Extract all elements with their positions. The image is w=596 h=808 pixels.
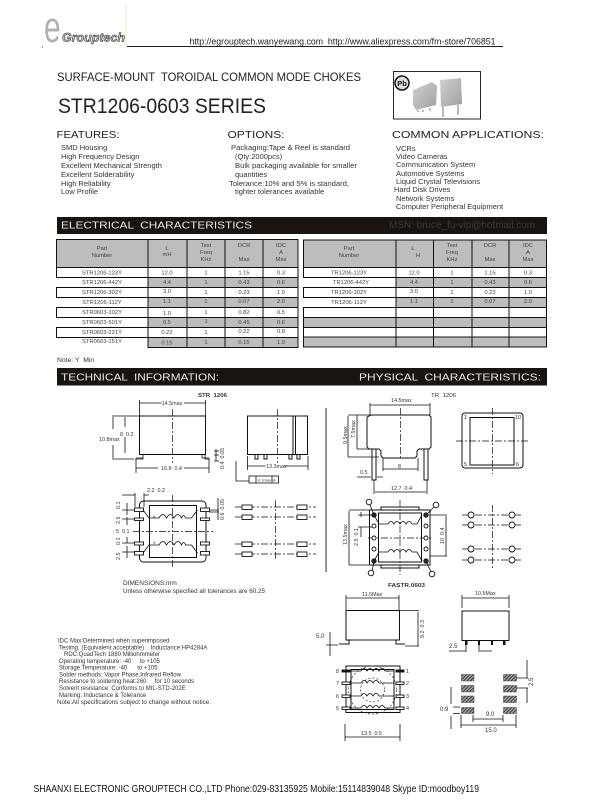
specification notes: Solvent resistance: Conforms to MIL-STD-202E xyxy=(59,686,186,692)
table: STR series: 1 xyxy=(204,330,208,336)
table: STR series: Max xyxy=(239,257,250,263)
drawing: STR 1206 front view: 10.8max xyxy=(99,437,120,443)
panel: features: Excellent Mechanical Strength xyxy=(61,161,162,170)
specification notes: RDC:QuadTech 1880 Milliohmmeter xyxy=(64,652,160,658)
drawing: STR 1206 front view: 14.5max xyxy=(162,401,183,407)
table: STR series xyxy=(56,239,298,348)
table: STR series: 1 xyxy=(204,310,208,316)
table: STR series: Part xyxy=(97,246,108,252)
table: STR series: 1.15 xyxy=(238,270,250,276)
drawing: TR 1206 profile: 8 xyxy=(398,464,401,470)
table: STR series: 1 xyxy=(204,319,208,325)
drawing: STR 1206 schematic bottom view: 2.5 0.1 xyxy=(116,538,122,560)
panel: features: Excellent Solderability xyxy=(61,170,135,179)
logo: e xyxy=(44,2,61,51)
table: STR series: 0.5 xyxy=(163,320,171,326)
website urls: http://egrouptech.wanyewang.com http://www.aliexpress.com/fm-store/706851 xyxy=(190,36,496,48)
table: TR series: Test xyxy=(447,243,458,249)
drawing: STR 1206 schematic bottom view xyxy=(116,488,226,568)
table: TR series: 0.43 xyxy=(484,280,496,286)
drawing: TR 1206 top view: 5 xyxy=(464,462,467,468)
table: TR series: Freq xyxy=(446,250,458,256)
product photo with Pb-free mark xyxy=(394,72,480,119)
table: TR series: 2.0 xyxy=(524,299,532,305)
subtitle: SURFACE-MOUNT TOROIDAL COMMON MODE CHOKES xyxy=(57,70,361,84)
table: TR series: A xyxy=(526,250,530,256)
drawing: STR 1206 schematic bottom view: * xyxy=(153,542,156,548)
table: TR series: 0.23 xyxy=(484,290,496,296)
drawing: FASTR 0603 bottom view: 6 xyxy=(336,694,339,700)
drawing: TR 1206 profile: TR 1206 xyxy=(431,393,456,399)
drawing: STR 1206 front view: 0.4 0.05 xyxy=(220,448,226,469)
table: STR series: 4.4 xyxy=(163,280,172,286)
drawing: STR 1206 schematic bottom view: 2.2 0.2 xyxy=(147,488,165,494)
panel: common applications: Video Cameras xyxy=(396,152,448,161)
table: STR series: mH xyxy=(162,252,172,258)
drawing: FASTR 0603 front view: 11.5Max xyxy=(362,592,383,598)
drawing: FASTR 0603 front view: 5.0 xyxy=(316,634,325,640)
specification notes: Testing: (Equivalent acceptable) Inductance:HP4284A xyxy=(59,646,207,652)
specification notes: Storage Temperature: -40 to +105 xyxy=(59,666,158,672)
table: TR series: 1 xyxy=(450,290,454,296)
logo xyxy=(42,2,126,51)
drawing: STR 1206 land pattern xyxy=(235,500,316,561)
drawing: FASTR 0603 bottom view: 4 xyxy=(406,706,409,712)
table: STR series: 1.0 xyxy=(277,340,285,346)
drawing: STR 1206 front view: STR 1206 xyxy=(198,393,227,399)
panel: options: (Qty:2000pcs) xyxy=(235,152,283,161)
table: TR series: 1.1 xyxy=(410,299,418,305)
specification notes: IDC Max:Determined when superimposed xyxy=(58,638,169,644)
table: STR series: 1 xyxy=(204,340,208,346)
panel: features: Low Profile xyxy=(61,187,98,196)
panel: common applications: Computer Peripheral Equipment xyxy=(396,202,504,211)
drawing: STR 1206 schematic bottom view: 0.6 0.05 xyxy=(220,499,226,520)
table: STR series: IDC xyxy=(276,243,286,249)
table: STR series: L xyxy=(165,246,169,252)
table: TR series: 1.0 xyxy=(524,290,532,296)
specification notes: Operating temperature: -40 to +105 xyxy=(59,659,161,665)
drawing: TR 1206 schematic: 13.5max xyxy=(343,524,349,545)
specification notes: Solder methods: Vapor Phase,Infrared Reflow xyxy=(59,672,182,678)
drawing: FASTR 0603 bottom view: 7 xyxy=(336,681,339,687)
heading: electrical characteristics: MSN: bruce_fu-vip@hotmail.com xyxy=(389,219,535,231)
panel: options: Tolerance:10% and 5% is standard, xyxy=(229,179,349,188)
table: STR series: 0.45 xyxy=(238,320,250,326)
table: TR series: DCR xyxy=(484,243,496,249)
drawing: FASTR 0603 footprint: 2.5 xyxy=(529,677,535,686)
header rule xyxy=(127,46,503,47)
drawing: STR 1206 side view: A xyxy=(273,478,276,482)
table: STR series: 0.3 xyxy=(277,270,285,276)
heading: technical and physical characteristics: PHYSICAL CHARACTERISTICS: xyxy=(359,372,541,384)
table: TR series: 0.07 xyxy=(484,299,496,305)
table note: Note: Y Min xyxy=(57,357,94,364)
dimensions note: DIMENSIONS:mm xyxy=(123,580,177,587)
drawing: STR 1206 side view: 0.1max xyxy=(258,478,271,482)
table: STR series: Max xyxy=(276,257,287,263)
drawing: TR 1206 profile: 14.5max xyxy=(391,398,412,404)
table: STR series: STR1206-123Y xyxy=(82,270,122,276)
table: STR series: STR0603-151Y xyxy=(82,339,122,345)
table: TR series xyxy=(304,240,546,347)
dimensions note xyxy=(123,580,265,595)
table: STR series: 0.22 xyxy=(238,329,250,335)
panel: features: SMD Housing xyxy=(61,143,107,152)
drawing: TR 1206 schematic: 10 0.4 xyxy=(440,528,446,544)
table: STR series: 0.15 xyxy=(161,340,173,346)
drawing: FASTR 0603 bottom view: 8 xyxy=(336,669,339,675)
table: TR series: Number xyxy=(339,253,359,259)
table: TR series: Max xyxy=(485,257,496,263)
specification notes: Marking: Inductance & Tolerance xyxy=(59,693,147,699)
specification notes: Resistance to soldering heat:260 for 10 seconds xyxy=(59,679,194,685)
drawing: TR 1206 schematic xyxy=(343,499,447,577)
table: STR series: 0.43 xyxy=(238,280,250,286)
drawing: FASTR 0603 bottom view: 1 xyxy=(406,669,409,675)
heading: technical and physical characteristics: TECHNICAL INFORMATION: xyxy=(61,372,219,384)
drawing: FASTR 0603 footprint xyxy=(440,660,535,734)
table: STR series: 0.6 xyxy=(277,280,285,286)
panel: common applications: Automotive Systems xyxy=(396,169,465,178)
drawing: TR 1206 profile: 0.5 xyxy=(360,470,368,476)
drawing: FASTR 0603 side view: 2.5 xyxy=(449,644,458,650)
panel: options xyxy=(228,129,358,196)
panel: common applications: Network Systems xyxy=(396,194,455,203)
table: TR series: TR1206-123Y xyxy=(331,270,367,276)
table: STR series: STR1206-112Y xyxy=(82,300,122,306)
table: TR series: 1 xyxy=(450,280,454,286)
footer contact line: SHAANXI ELECTRONIC GROUPTECH CO.,LTD Phone:029-83135925 Mobile:15114839048 Skype ID:moodboy119 xyxy=(34,784,479,795)
table: STR series: 1 xyxy=(204,290,208,296)
drawing: TR 1206 land pattern xyxy=(462,505,521,570)
drawing: FASTR 0603 front view: 8.2 0.3 xyxy=(420,620,426,638)
table: TR series: 1.15 xyxy=(484,270,496,276)
table: STR series: KHz xyxy=(201,257,212,263)
heading: electrical characteristics: ELECTRICAL CHARACTERISTICS xyxy=(61,220,252,232)
table: TR series: H xyxy=(416,253,420,259)
panel: options: tighter tolerances available xyxy=(235,187,324,196)
dimensions note: Unless otherwise specified all tolerances are 60.25 xyxy=(123,588,265,595)
table: STR series: 1 xyxy=(204,270,208,276)
panel: options: Packaging:Tape & Reel is standard xyxy=(231,143,350,152)
drawing: TR 1206 top view: 10 xyxy=(515,415,521,421)
drawing: TR 1206 profile: 12.7 0.4 xyxy=(391,486,412,492)
panel: common applications xyxy=(392,129,544,211)
drawing: TR 1206 top view: 1 xyxy=(464,415,467,421)
heading: electrical characteristics xyxy=(57,217,547,234)
table: TR series: 0.3 xyxy=(524,270,532,276)
drawing: STR 1206 front view xyxy=(99,393,227,473)
logo: Grouptech xyxy=(62,32,125,44)
table: STR series: STR0603-102Y xyxy=(82,310,122,316)
drawing: FASTR 0603 bottom view: 5 xyxy=(336,706,339,712)
table: TR series: L xyxy=(411,246,415,252)
specification notes: Note:All specifications subject to change without notice. xyxy=(57,700,211,706)
drawing: STR 1206 front view: 16.8 0.4 xyxy=(161,466,182,472)
table: STR series: Freq xyxy=(200,250,212,256)
table: STR series: 0.82 xyxy=(238,310,250,316)
table: STR series: DCR xyxy=(238,243,250,249)
drawing: FASTR 0603 bottom view: 3 xyxy=(406,694,409,700)
table: STR series: 1 xyxy=(204,280,208,286)
table: STR series: 0.23 xyxy=(238,290,250,296)
drawing: FASTR 0603 front view xyxy=(316,592,426,656)
table: STR series: A xyxy=(279,250,283,256)
table: TR series: 12.0 xyxy=(408,270,420,276)
table: STR series: 0.6 xyxy=(277,320,285,326)
table: STR series: 1.1 xyxy=(163,299,171,305)
drawing: STR 1206 side view: 13.3max xyxy=(266,464,287,470)
panel: features xyxy=(56,129,162,196)
heading: technical and physical characteristics xyxy=(57,368,547,386)
table: TR series: TR1206-302Y xyxy=(331,290,367,296)
table: TR series: 1 xyxy=(450,299,454,305)
panel: options: OPTIONS: xyxy=(228,129,284,141)
table: TR series: Part xyxy=(344,246,355,252)
table: STR series: 0.5 xyxy=(277,310,285,316)
table: STR series: 12.0 xyxy=(161,270,173,276)
panel: common applications: Communication System xyxy=(396,160,475,169)
panel: features: FEATURES: xyxy=(56,129,120,141)
table: STR series: 1 xyxy=(204,299,208,305)
drawing: STR 1206 schematic bottom view: 5 0.1 xyxy=(116,529,130,535)
table: STR series: 3.0 xyxy=(163,289,171,295)
specification notes xyxy=(57,638,211,706)
drawing: FASTR 0603 footprint: 15.0 xyxy=(485,728,497,734)
table: STR series: 2.0 xyxy=(277,299,285,305)
panel: options: quantities xyxy=(235,170,267,179)
drawing: STR 1206 schematic bottom view: * xyxy=(153,516,156,522)
table: STR series: 0.8 xyxy=(277,329,285,335)
drawing: FASTR 0603 side view: 10.5Max xyxy=(475,591,496,597)
table: STR series: STR0603-221Y xyxy=(82,330,122,336)
drawing: STR 1206 front view: 8 0.2 xyxy=(120,432,134,438)
table: STR series: Test xyxy=(201,243,212,249)
drawing: FASTR 0603 footprint: 0.9 xyxy=(440,707,449,713)
panel: features: High Frequency Design xyxy=(61,152,139,161)
divider: vertical xyxy=(325,408,328,572)
table: TR series: TR1206-112Y xyxy=(331,300,367,306)
series title: STR1206-0603 SERIES xyxy=(58,95,266,118)
panel: common applications: COMMON APPLICATIONS: xyxy=(392,129,544,141)
table: TR series: 3.0 xyxy=(410,289,418,295)
drawing: STR 1206 side view xyxy=(236,409,308,483)
panel: features: High Reliability xyxy=(61,179,111,188)
drawing: FASTR 0603 bottom view xyxy=(336,666,409,741)
drawing: STR 1206 schematic bottom view: 2.5 0.1 xyxy=(116,502,122,524)
table: TR series: 0.6 xyxy=(524,280,532,286)
table: TR series: KHz xyxy=(447,257,458,263)
drawing: FASTR 0603 footprint: 9.0 xyxy=(486,712,495,718)
table: STR series: 1.0 xyxy=(277,290,285,296)
panel: options: Bulk packaging available for smaller xyxy=(235,161,358,170)
drawing: FASTR 0603 bottom view: 13.5 0.5 xyxy=(361,731,382,737)
table: TR series: IDC xyxy=(523,243,533,249)
table: TR series: 1 xyxy=(450,270,454,276)
table: STR series: STR1206-302Y xyxy=(82,290,122,296)
table: STR series: STR1206-442Y xyxy=(82,280,122,286)
table: STR series: 0.07 xyxy=(238,299,250,305)
drawing: TR 1206 profile xyxy=(343,393,456,494)
table: STR series: Number xyxy=(92,253,112,259)
drawing: TR 1206 top view: 6 xyxy=(516,462,519,468)
table: STR series: STR0603-501Y xyxy=(82,320,122,326)
drawing: FASTR 0603 bottom view: 2 xyxy=(406,681,409,687)
table: TR series: TR1206-442Y xyxy=(333,280,369,286)
panel: common applications: Hard Disk Drives xyxy=(394,185,451,194)
label: FASTR 0603: FASTR.0603 xyxy=(388,583,426,589)
panel: common applications: VCRs xyxy=(396,144,416,153)
drawing: FASTR 0603 side view xyxy=(449,591,509,652)
drawing: TR 1206 profile: 9.5max xyxy=(343,426,349,444)
drawing: TR 1206 top view xyxy=(456,408,530,474)
table: TR series: 4.4 xyxy=(410,280,419,286)
product photo with Pb-free mark: Pb xyxy=(397,79,407,88)
table: STR series: 0.15 xyxy=(238,340,250,346)
table: STR series: 1.0 xyxy=(163,311,171,317)
table: TR series: Max xyxy=(523,257,534,263)
drawing: TR 1206 profile: 7.5max xyxy=(351,420,357,438)
drawing: TR 1206 schematic: 2.5 0.1 xyxy=(354,528,360,546)
panel: common applications: Liquid Crystal Televisions xyxy=(396,177,480,186)
table: STR series: 0.22 xyxy=(161,330,173,336)
